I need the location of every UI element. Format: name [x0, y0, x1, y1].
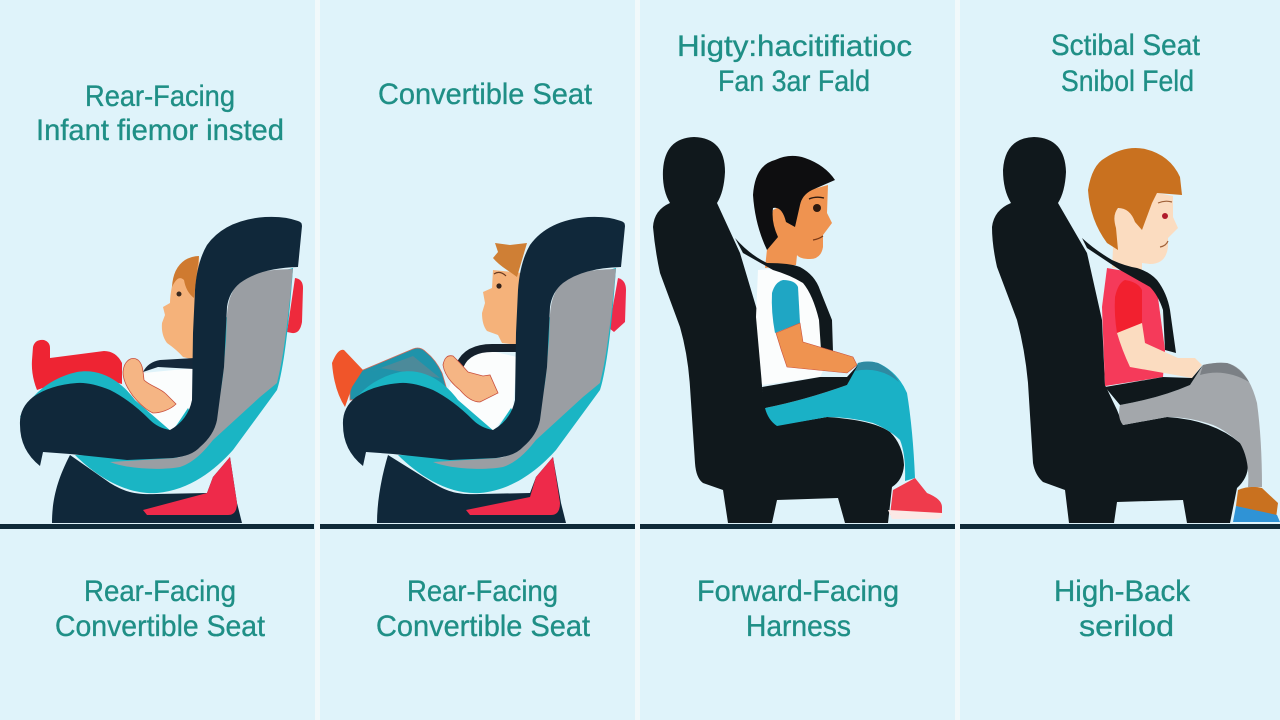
heading: panel 1: Infant fiemor insted: [36, 114, 284, 147]
illustration: toddler in convertible seat: [332, 217, 626, 523]
illustration: child in high-back booster: [992, 137, 1280, 523]
caption: panel 2: [376, 575, 591, 643]
caption: panel 4: serilod: [1079, 610, 1174, 643]
caption: panel 2: Convertible Seat: [376, 610, 591, 643]
panel: forward-facing harness: [640, 0, 955, 720]
heading: panel 3: Higty:hacitifiatioc: [677, 30, 912, 63]
heading: panel 3: [677, 30, 912, 98]
heading: panel 4: Snibol Feld: [1061, 65, 1194, 98]
caption: panel 3: Harness: [746, 610, 851, 643]
illustration: infant in rear-facing seat: [20, 217, 303, 523]
heading: panel 4: Sctibal Seat: [1051, 29, 1201, 62]
caption: panel 1: Convertible Seat: [55, 610, 266, 643]
caption: panel 3: [697, 575, 899, 643]
heading: panel 1: [36, 80, 284, 147]
heading: panel 4: [1051, 29, 1201, 98]
ground line: [0, 524, 1280, 529]
caption: panel 4: High-Back: [1054, 575, 1191, 608]
illustration: child in forward-facing harness: [653, 137, 942, 523]
panel: high-back booster: [960, 0, 1280, 720]
heading: panel 3: Fan 3ar Fald: [718, 65, 870, 98]
caption: panel 1: Rear-Facing: [84, 575, 236, 608]
panel: rear-facing convertible seat: [320, 0, 635, 720]
caption: panel 1: [55, 575, 266, 643]
heading: panel 2: Convertible Seat: [378, 78, 593, 111]
caption: panel 4: [1054, 575, 1191, 643]
panel: rear-facing infant seat: [0, 0, 315, 720]
caption: panel 3: Forward-Facing: [697, 575, 899, 608]
heading: panel 1: Rear-Facing: [85, 80, 235, 113]
caption: panel 2: Rear-Facing: [407, 575, 558, 608]
